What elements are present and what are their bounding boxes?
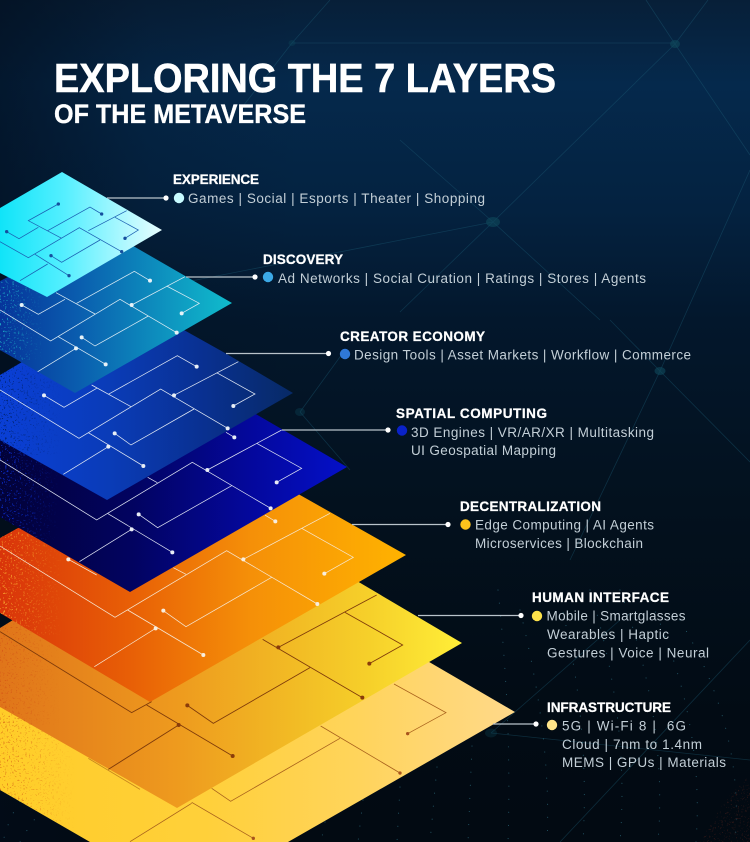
bullet: spatial computing bbox=[397, 425, 407, 436]
callout: human interface: Gestures | Voice | Neural bbox=[547, 646, 709, 660]
items: human interface: Mobile | Smartglasses bbox=[546, 608, 686, 624]
heading: infrastructure: INFRASTRUCTURE bbox=[547, 700, 671, 715]
bullet: human interface bbox=[532, 611, 542, 621]
layer 4: spatial computing plane bbox=[0, 399, 347, 592]
layer 6: human interface plane bbox=[0, 571, 462, 808]
callout: infrastructure bbox=[493, 700, 726, 770]
items: discovery: Ad Networks | Social Curation | Ratings | Stores | Agents bbox=[278, 271, 646, 286]
callout: decentralization bbox=[352, 499, 654, 551]
layer 3 circuit traces bbox=[0, 356, 255, 474]
items: decentralization: Edge Computing | AI Agents bbox=[475, 518, 654, 532]
heading: experience: EXPERIENCE bbox=[173, 172, 259, 187]
bullet: infrastructure bbox=[547, 720, 557, 730]
layer 7: infrastructure plane bbox=[0, 645, 515, 842]
items: creator economy: Design Tools | Asset Markets | Workflow | Commerce bbox=[354, 348, 691, 362]
layer 7 circuit traces bbox=[130, 684, 446, 842]
title line 2: OF THE METAVERSE bbox=[54, 99, 306, 129]
layer 6 circuit traces bbox=[0, 595, 403, 789]
callout: infrastructure: MEMS | GPUs | Materials bbox=[562, 755, 726, 770]
heading: human interface: HUMAN INTERFACE bbox=[532, 590, 669, 605]
layer 4 circuit traces bbox=[0, 430, 302, 562]
layer 2: discovery plane bbox=[0, 246, 232, 393]
callout: experience bbox=[107, 172, 485, 206]
layer 2 circuit traces bbox=[0, 271, 199, 372]
callout: infrastructure: Cloud | 7nm to 1.4nm bbox=[562, 737, 702, 752]
layer 3: creator economy plane bbox=[0, 325, 293, 500]
heading: spatial computing: SPATIAL COMPUTING bbox=[396, 406, 547, 421]
callout: human interface bbox=[418, 590, 709, 660]
layer 5 circuit traces bbox=[0, 513, 353, 667]
callout: spatial computing: UI Geospatial Mapping bbox=[411, 443, 556, 458]
bullet: decentralization bbox=[460, 519, 471, 530]
title bbox=[54, 55, 556, 129]
items: spatial computing: 3D Engines | VR/AR/XR | Multitasking bbox=[411, 425, 654, 440]
heading: creator economy: CREATOR ECONOMY bbox=[340, 329, 485, 344]
callout: decentralization: Microservices | Blockchain bbox=[475, 536, 643, 551]
heading: discovery: DISCOVERY bbox=[263, 252, 343, 267]
layer 1: experience plane bbox=[0, 172, 162, 297]
callout: human interface: Wearables | Haptic bbox=[547, 627, 669, 642]
bullet: creator economy bbox=[340, 349, 350, 359]
bullet: experience bbox=[174, 193, 184, 203]
bullet: discovery bbox=[263, 272, 273, 282]
callout: discovery bbox=[186, 252, 646, 286]
items: infrastructure: 5G | Wi-Fi 8 | 6G bbox=[562, 718, 686, 734]
title line 1: EXPLORING THE 7 LAYERS bbox=[54, 55, 556, 101]
layer 5: decentralization plane bbox=[0, 484, 406, 702]
heading: decentralization: DECENTRALIZATION bbox=[460, 499, 601, 514]
callout: spatial computing bbox=[282, 406, 654, 458]
layer 1 circuit traces bbox=[0, 202, 138, 281]
callout: creator economy bbox=[226, 329, 691, 362]
items: experience: Games | Social | Esports | Theater | Shopping bbox=[188, 191, 485, 206]
